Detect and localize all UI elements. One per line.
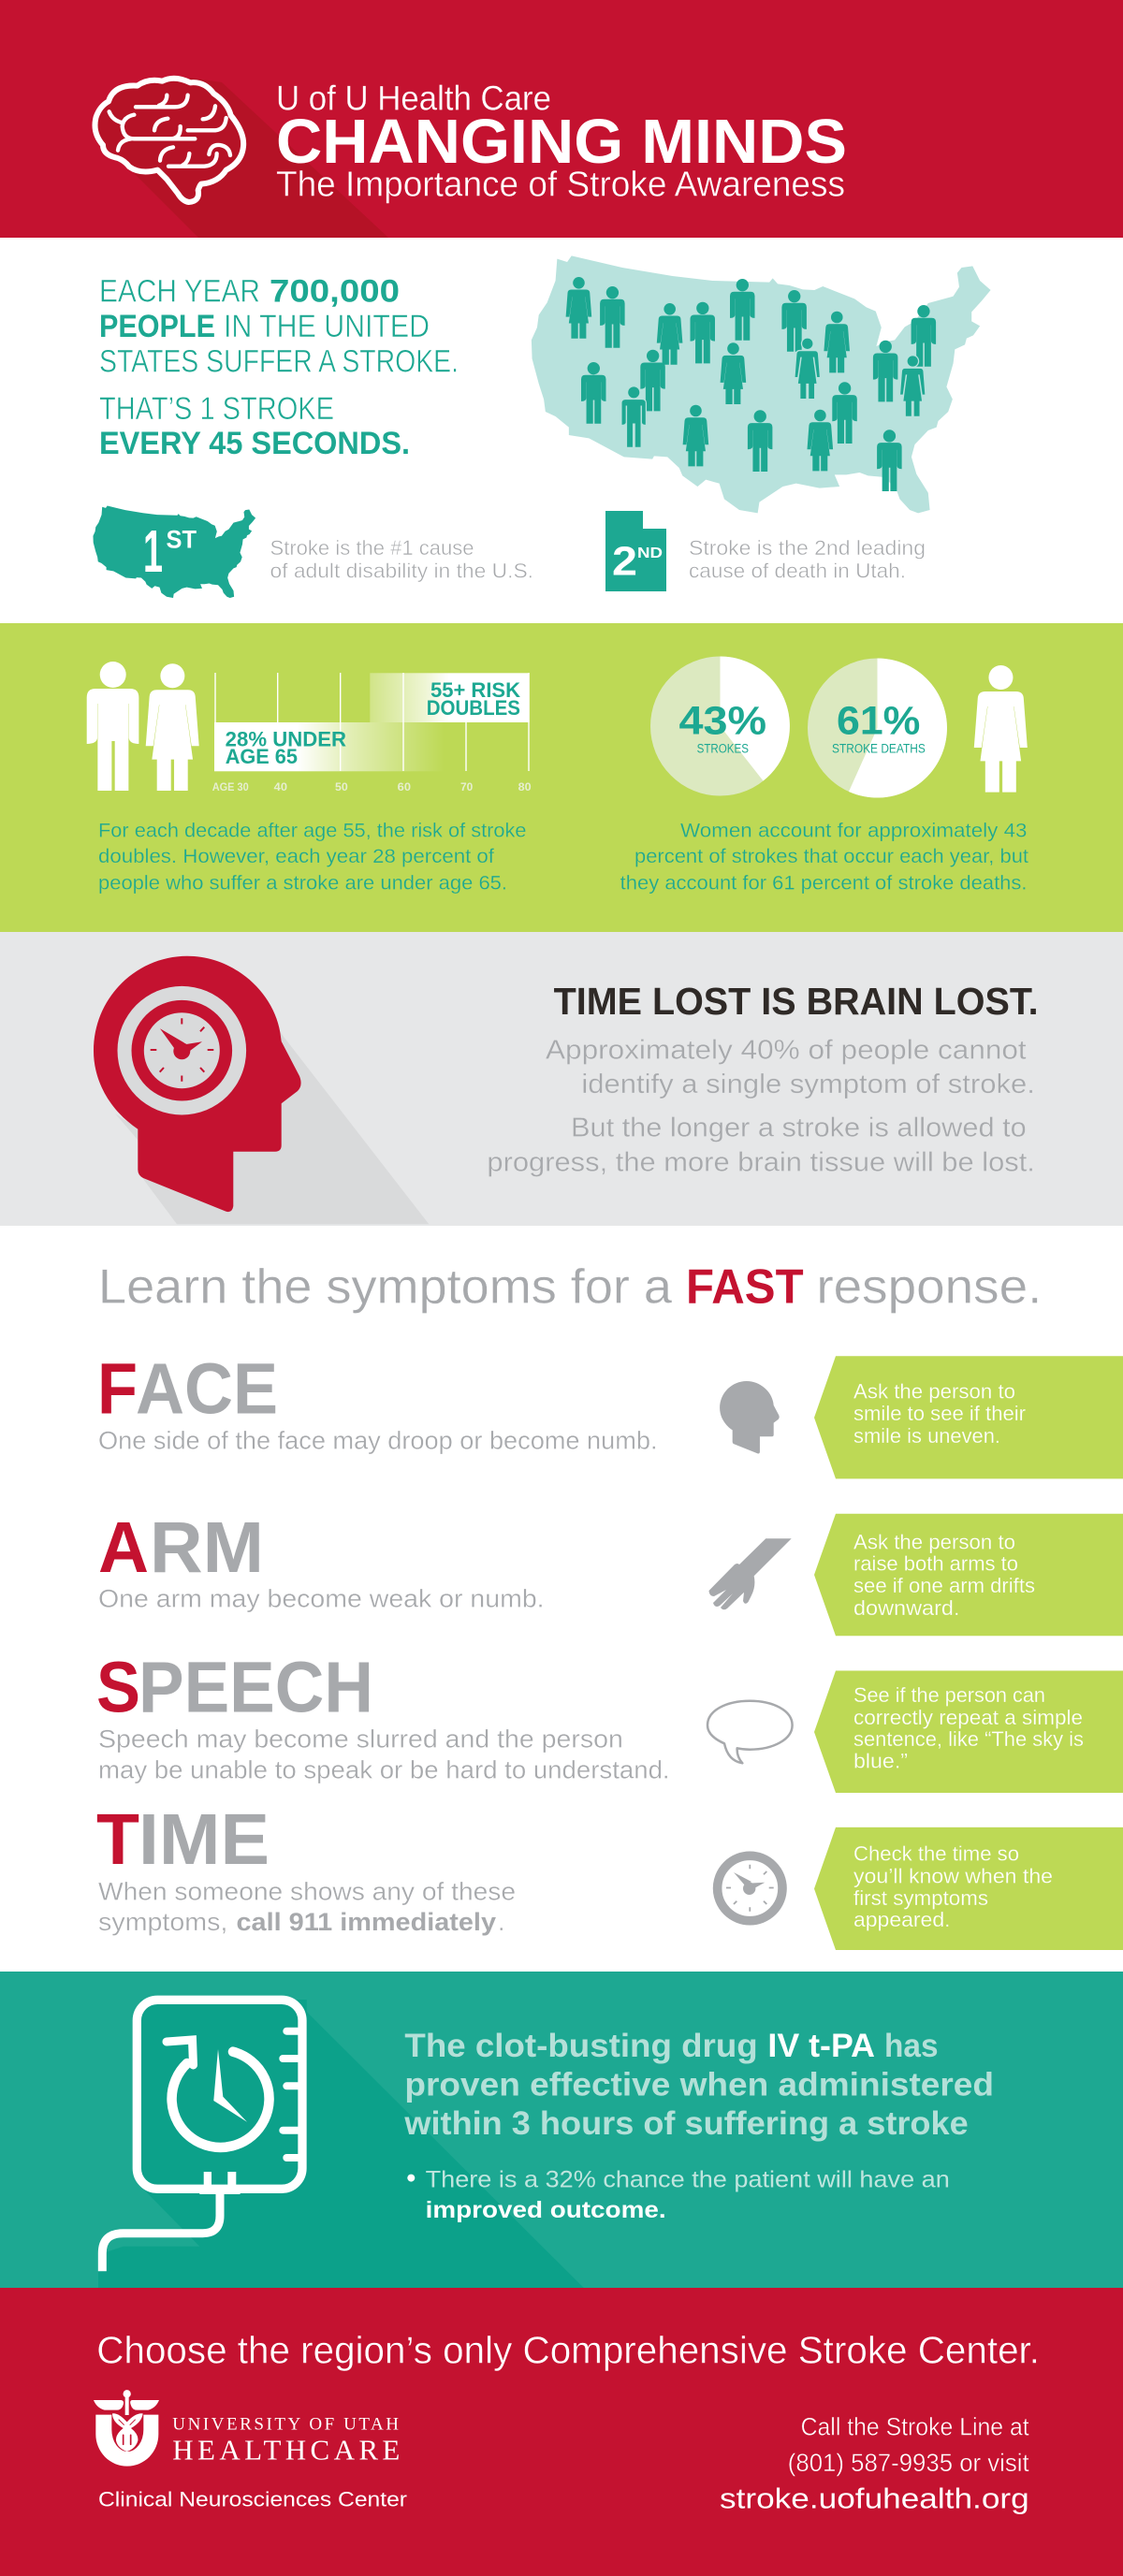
callout: arm: see if one arm drifts — [853, 1574, 1035, 1597]
panel: footer — [0, 2288, 1123, 2576]
text: women statistic: they account for 61 percent of stroke deaths. — [620, 870, 1028, 894]
icon: clock — [718, 1856, 782, 1921]
text: symptom awareness: Approximately 40% of people cannot — [546, 1035, 1027, 1065]
FAST row: arm: A — [98, 1507, 149, 1588]
callout: speech: correctly repeat a simple — [853, 1706, 1083, 1729]
heading: learn the symptoms: FAST — [686, 1260, 804, 1315]
text: number one cause of disability: of adult disability in the U.S. — [270, 560, 533, 582]
text: yearly stroke statistic: IN THE UNITED — [224, 309, 430, 344]
chart axis labels: 80 — [518, 782, 532, 793]
FAST row: speech: S — [96, 1647, 140, 1727]
callout: arm: raise both arms to — [853, 1551, 1018, 1575]
FAST row: speech — [96, 1647, 670, 1783]
chart axis labels: 40 — [274, 782, 287, 793]
FAST row: arm: One arm may become weak or numb. — [98, 1585, 545, 1613]
text: yearly stroke statistic: EACH YEAR — [99, 274, 260, 310]
text: second leading cause of death — [689, 536, 926, 582]
callout: time: first symptoms — [853, 1886, 988, 1910]
text: women statistic: Women account for approximately 43 — [680, 818, 1028, 841]
callout: face: Ask the person to — [853, 1380, 1015, 1404]
pie chart: 43% strokes: 43% — [679, 699, 766, 744]
chart label: 28% — [226, 727, 346, 768]
heading: learn the symptoms — [98, 1260, 1042, 1315]
FAST row: speech: PEECH — [139, 1647, 373, 1727]
panel: stroke statistics — [0, 238, 1123, 623]
heading: comprehensive stroke center: Choose the region’s only Comprehensive Stroke Center. — [96, 2328, 1040, 2371]
heading: clot-busting drug: proven effective when administered — [404, 2066, 994, 2103]
icon: woman — [974, 665, 1028, 793]
text: yearly stroke statistic: THAT’S 1 STROKE — [99, 391, 334, 427]
FAST row: time: IME — [139, 1799, 270, 1880]
head shadow — [115, 1032, 429, 1224]
logo: University of Utah Healthcare: UNIVERSITY OF UTAH — [172, 2415, 399, 2435]
heading: clot-busting drug: has — [884, 2028, 938, 2064]
panel: FAST symptoms — [0, 1226, 1123, 1972]
bullet: improved outcome: There is a 32% chance the patient will have an — [426, 2166, 950, 2192]
text: stroke line contact: stroke.uofuhealth.org — [720, 2482, 1029, 2515]
pie chart: 61% stroke deaths: STROKE DEATHS — [832, 741, 926, 755]
FAST row: arm: RM — [150, 1507, 264, 1588]
text: symptom awareness: progress, the more brain tissue will be lost. — [487, 1147, 1035, 1177]
heading: time lost is brain lost: TIME LOST IS BRAIN LOST. — [554, 980, 1039, 1023]
text: decade risk: doubles. However, each year 28 percent of — [98, 844, 495, 867]
heading: clot-busting drug: IV t-PA — [767, 2028, 875, 2064]
chart axis labels: AGE 30 — [212, 782, 249, 793]
icon: head with clock — [94, 956, 301, 1212]
icon: 2nd Utah: ND — [637, 546, 663, 561]
callout: face: smile to see if their — [853, 1402, 1026, 1425]
heading: clot-busting drug: within 3 hours of suffering a stroke — [403, 2105, 969, 2142]
chart axis labels: 50 — [335, 782, 348, 793]
text: yearly stroke statistic: PEOPLE — [99, 309, 215, 344]
icon: 2nd Utah: 2 — [612, 539, 637, 584]
FAST row: arm — [98, 1507, 545, 1613]
text: clinical neurosciences center: Clinical Neurosciences Center — [98, 2487, 407, 2511]
text: women statistic — [620, 818, 1028, 894]
callout: time — [814, 1827, 1123, 1950]
icon: face — [720, 1381, 780, 1453]
icon: man and woman — [87, 662, 199, 791]
bullet: improved outcome: improved outcome. — [426, 2197, 666, 2223]
logo: University of Utah Healthcare: HEALTHCARE — [172, 2433, 400, 2466]
text: yearly stroke statistic — [99, 274, 459, 461]
FAST row: time: T — [96, 1799, 139, 1880]
FAST row: time: . — [498, 1908, 505, 1936]
callout: face: smile is uneven. — [853, 1424, 1000, 1448]
icon: 2nd Utah — [605, 511, 666, 591]
icon: IV bag with clock — [102, 2000, 302, 2271]
panel: header — [0, 0, 1123, 238]
text: number one cause of disability — [270, 536, 533, 582]
icon: 1st US map: 1 — [143, 517, 163, 585]
icon: 1st US map: ST — [167, 526, 197, 554]
text: decade risk: people who suffer a stroke are under age 65. — [98, 870, 507, 894]
pie chart: 61% stroke deaths: 61% — [837, 699, 920, 744]
callout: arm: Ask the person to — [853, 1530, 1015, 1553]
pie chart: 43% strokes — [650, 657, 790, 795]
pie chart: 61% stroke deaths — [808, 659, 947, 797]
callout: speech — [814, 1671, 1123, 1793]
FAST row: speech: may be unable to speak or be hard to understand. — [98, 1755, 670, 1783]
chart: age risk timeline — [212, 673, 532, 793]
text: decade risk — [98, 818, 526, 894]
callout: speech: sentence, like “The sky is — [853, 1727, 1084, 1751]
heading: learn the symptoms: response. — [816, 1260, 1042, 1315]
IV bag shadow — [98, 2000, 584, 2288]
FAST row: speech: Speech may become slurred and the person — [98, 1725, 623, 1754]
text: yearly stroke statistic: STATES SUFFER A STROKE. — [99, 343, 459, 379]
icon: 1st US map — [93, 506, 255, 598]
text: symptom awareness: identify a single symptom of stroke. — [581, 1070, 1035, 1099]
heading: clot-busting drug: The clot-busting drug — [404, 2028, 758, 2064]
callout: arm: downward. — [853, 1596, 960, 1620]
panel: IV t-PA treatment — [0, 1972, 1123, 2288]
text: stroke line contact: (801) 587-9935 or visit — [788, 2449, 1029, 2477]
callout: arm — [814, 1514, 1123, 1636]
chart label: 55+ — [427, 678, 520, 720]
text: symptom awareness: But the longer a stroke is allowed to — [571, 1113, 1027, 1142]
callout: time: appeared. — [853, 1908, 951, 1931]
callout: face — [814, 1356, 1123, 1478]
text: women statistic: percent of strokes that occur each year, but — [634, 844, 1028, 867]
FAST row: face: ACE — [136, 1349, 278, 1430]
text: number one cause of disability: Stroke is the #1 cause — [270, 536, 474, 560]
pie chart: 43% strokes: STROKES — [697, 741, 749, 755]
logo: University of Utah Healthcare — [94, 2390, 400, 2467]
panel: time lost — [0, 932, 1123, 1226]
FAST row: time: call 911 immediately — [236, 1908, 496, 1936]
FAST row: time: symptoms, — [98, 1908, 227, 1936]
text: stroke line contact — [720, 2412, 1029, 2515]
title block: U of U Health Care — [276, 79, 551, 118]
callout: time: you’ll know when the — [853, 1865, 1053, 1888]
icon: arm — [709, 1538, 792, 1609]
chart label: 55+: 55+ RISK — [430, 678, 520, 702]
text: second leading cause of death: cause of death in Utah. — [689, 560, 906, 582]
callout: speech: blue.” — [853, 1750, 908, 1773]
chart label: 28%: 28% UNDER — [226, 727, 346, 750]
callout: speech: See if the person can — [853, 1683, 1045, 1707]
callout: time: Check the time so — [853, 1842, 1019, 1866]
FAST row: face: One side of the face may droop or become numb. — [98, 1426, 658, 1454]
chart label: 55+: DOUBLES — [427, 696, 520, 720]
chart axis labels: 70 — [460, 782, 473, 793]
FAST row: face — [97, 1349, 658, 1454]
icon: speech bubble — [707, 1701, 793, 1763]
icon: brain — [95, 79, 243, 202]
title block: CHANGING MINDS — [276, 107, 847, 177]
text: yearly stroke statistic: 700,000 — [270, 274, 400, 310]
bullet: improved outcome — [407, 2166, 950, 2223]
text: yearly stroke statistic: EVERY 45 SECONDS. — [99, 426, 410, 461]
brain icon shadow — [124, 78, 388, 238]
text: symptom awareness — [487, 1035, 1035, 1177]
text: decade risk: For each decade after age 55, the risk of stroke — [98, 818, 526, 841]
FAST row: face: F — [97, 1349, 138, 1430]
title block — [276, 79, 847, 204]
FAST row: time — [96, 1799, 516, 1936]
chart label: 28%: AGE 65 — [226, 745, 298, 768]
FAST row: time: When someone shows any of these — [98, 1877, 516, 1905]
heading: clot-busting drug — [403, 2028, 994, 2142]
chart axis labels: 60 — [398, 782, 411, 793]
chart axis labels — [212, 782, 532, 793]
map: United States with people — [532, 255, 991, 513]
panel: age and gender — [0, 623, 1123, 932]
text: stroke line contact: Call the Stroke Line at — [801, 2412, 1029, 2440]
heading: learn the symptoms: Learn the symptoms for a — [98, 1260, 672, 1315]
title block: The Importance of Stroke Awareness — [276, 165, 845, 204]
text: second leading cause of death: Stroke is the 2nd leading — [689, 536, 926, 560]
